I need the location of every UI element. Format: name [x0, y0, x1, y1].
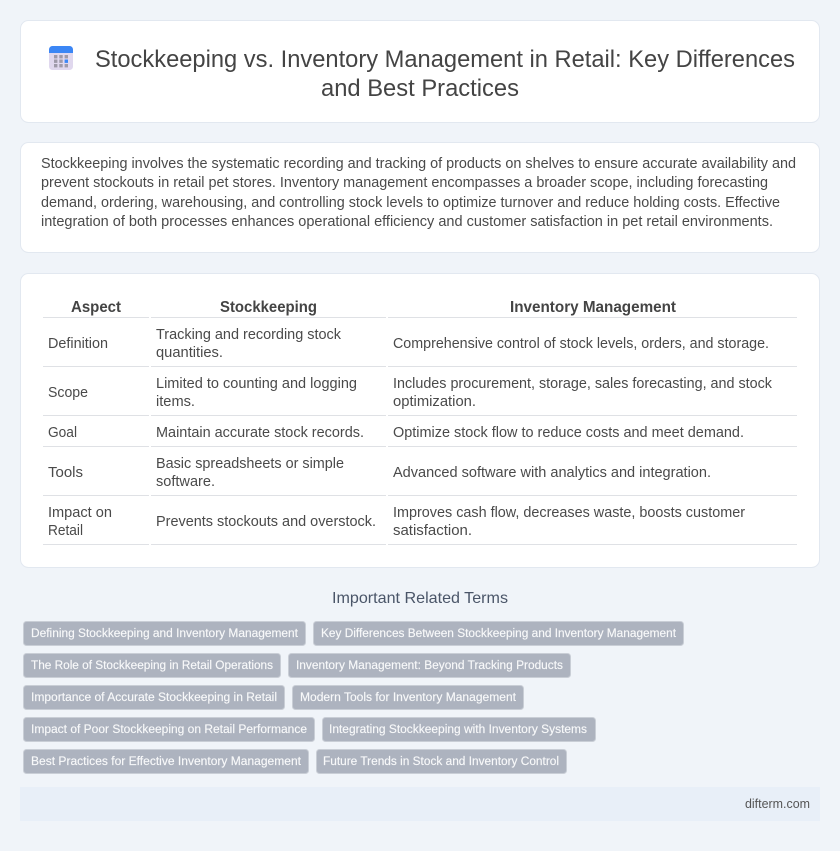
row: goal: Optimize stock flow to reduce costs and meet demand. [393, 425, 744, 441]
panel: related term tags: Modern Tools for Inventory Management [300, 690, 517, 704]
table header [71, 299, 676, 316]
panel: related term tags: Importance of Accurate Stockkeeping in Retail [31, 690, 277, 704]
panel: related term tags: Integrating Stockkeeping with Inventory Systems [329, 722, 587, 736]
row: impact on retail [48, 505, 745, 539]
row: definition [48, 327, 769, 361]
panel: related term tags: Impact of Poor Stockkeeping on Retail Performance [31, 722, 307, 736]
footer: difterm.com [745, 796, 810, 811]
table header: Inventory Management [510, 299, 676, 316]
row: scope: Includes procurement, storage, sales forecasting, and stock [393, 376, 773, 392]
row: impact on retail: Impact on [48, 505, 112, 521]
row: scope [48, 376, 773, 410]
panel: comparison table [20, 274, 820, 568]
panel: related term tags: Defining Stockkeeping and Inventory Management [31, 626, 299, 640]
row: impact on retail: Improves cash flow, decreases waste, boosts customer [393, 505, 745, 521]
row: definition: Comprehensive control of stock levels, orders, and storage. [393, 336, 769, 352]
panel: related term tags: Key Differences Between Stockkeeping and Inventory Management [321, 626, 677, 640]
footer [20, 787, 820, 821]
row: tools: Basic spreadsheets or simple [156, 456, 344, 472]
row: impact on retail: Retail [48, 523, 83, 539]
row: tools: software. [156, 474, 215, 490]
panel: introduction text: demand, ordering, warehousing, and controlling stock levels to optimize turnover and reduce holding costs. Effective [41, 195, 780, 211]
panel: related term tags: Inventory Management: Beyond Tracking Products [296, 658, 563, 672]
panel: introduction text [20, 142, 820, 252]
title: Stockkeeping vs. Inventory Management in Retail: Key Differences [95, 46, 795, 73]
row: scope: items. [156, 394, 195, 410]
table header: Aspect [71, 299, 121, 316]
row: goal: Goal [48, 425, 77, 441]
row: definition: Tracking and recording stock [156, 327, 342, 343]
row: goal: Maintain accurate stock records. [156, 425, 364, 441]
row: impact on retail: satisfaction. [393, 523, 472, 539]
row: goal [48, 425, 744, 441]
heading: important related terms: Important Related Terms [332, 590, 508, 607]
icon: calendar [49, 46, 73, 70]
panel: introduction text: integration of both processes enhances operational efficiency and customer satisfaction in pet retail environments. [41, 214, 773, 230]
row: scope: Limited to counting and logging [156, 376, 357, 392]
row: definition: Definition [48, 336, 108, 352]
panel: introduction text: prevent stockouts in retail pet stores. Inventory management encompasses a broader scope, including forecasting [41, 175, 768, 191]
panel: introduction text: Stockkeeping involves the systematic recording and tracking of products on shelves to ensure accurate availability and [41, 156, 796, 172]
panel: related term tags: Best Practices for Effective Inventory Management [31, 754, 302, 768]
title: and Best Practices [321, 75, 519, 102]
row: scope: Scope [48, 385, 88, 401]
row: tools: Tools [48, 465, 83, 481]
panel: header [20, 20, 820, 122]
row: scope: optimization. [393, 394, 476, 410]
panel: related term tags: Future Trends in Stock and Inventory Control [323, 754, 559, 768]
row: tools [48, 456, 711, 490]
row: definition: quantities. [156, 345, 223, 361]
table header: Stockkeeping [220, 299, 317, 316]
table row lines [43, 317, 797, 545]
title [95, 46, 795, 102]
row: impact on retail: Prevents stockouts and overstock. [156, 514, 376, 530]
panel: related term tags [24, 622, 684, 774]
row: tools: Advanced software with analytics and integration. [393, 465, 711, 481]
panel: related term tags: The Role of Stockkeeping in Retail Operations [31, 658, 273, 672]
